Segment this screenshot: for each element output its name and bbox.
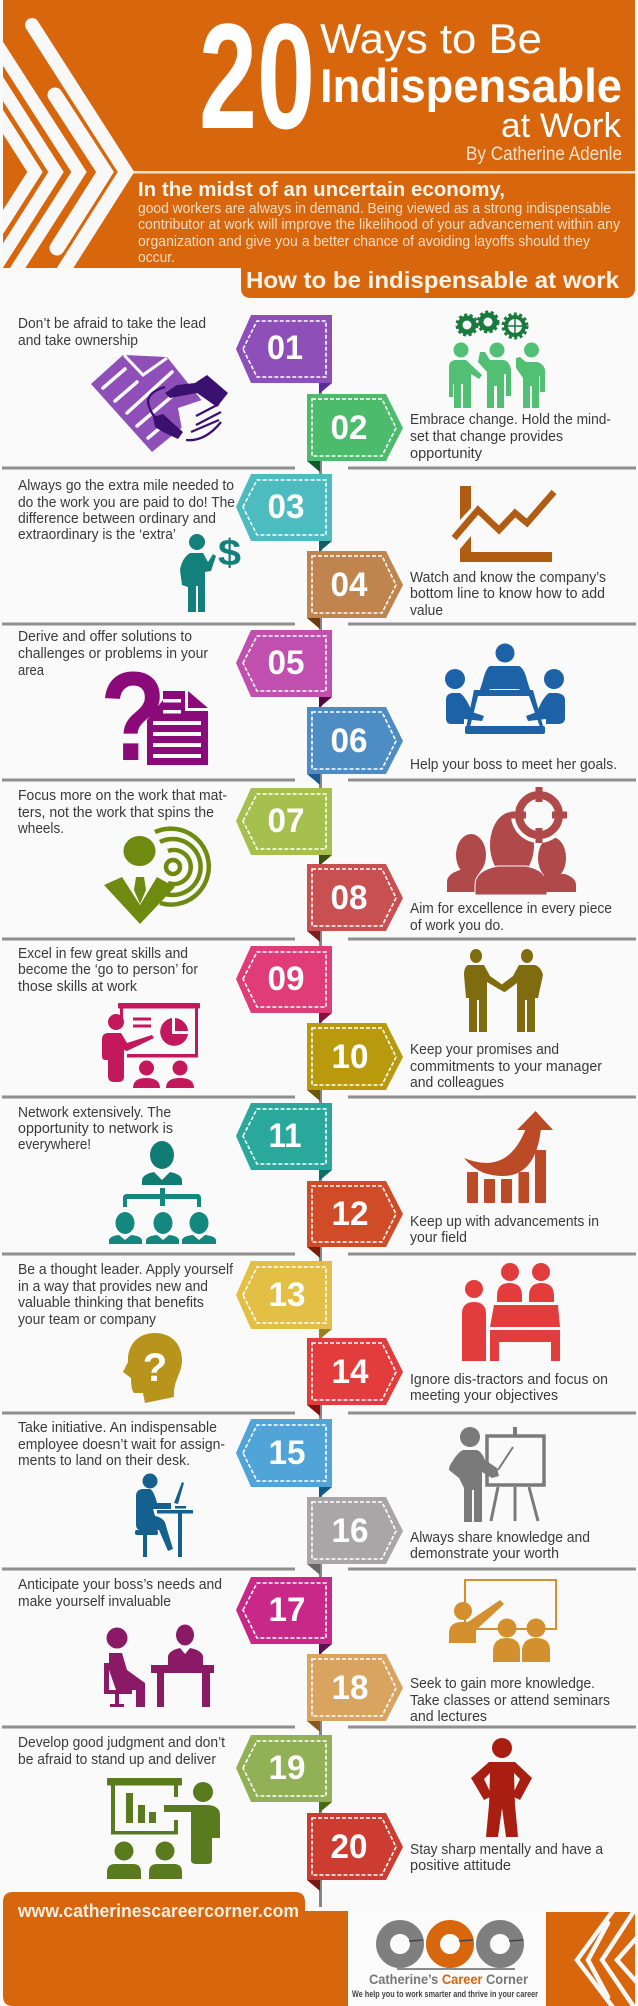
badge 11: [236, 1103, 332, 1181]
icon: two people shaking hands: [464, 949, 543, 1032]
text 15: ments to land on their desk.: [18, 1453, 190, 1469]
tip 01: [18, 315, 332, 452]
text 20: Stay sharp mentally and have a: [410, 1842, 604, 1858]
badge 12: [307, 1181, 403, 1258]
badge 08: 08: [330, 879, 368, 917]
tip 07: [17, 788, 332, 924]
tip 12: [307, 1111, 599, 1258]
tip 10: [307, 949, 602, 1101]
tip 17: [18, 1577, 332, 1707]
text 14: Ignore dis-tractors and focus on: [410, 1372, 608, 1388]
footer chevron panel: [546, 1908, 638, 2006]
text 10: Keep your promises and: [410, 1042, 559, 1058]
text 02: [410, 412, 611, 462]
intro text: contributor at work will improve the likelihood of your advancement within any: [138, 217, 621, 233]
text 05: Derive and offer solutions to: [18, 629, 192, 645]
text 17: make yourself invaluable: [18, 1594, 171, 1610]
text 04: bottom line to know how to add: [410, 586, 605, 602]
logo: [348, 1912, 546, 2006]
text 11: everywhere!: [18, 1137, 91, 1153]
text 12: your field: [410, 1230, 467, 1246]
text 04: Watch and know the company’s: [410, 570, 606, 586]
badge 14: [307, 1338, 403, 1416]
tip 20: [307, 1738, 604, 1891]
text 13: your team or company: [18, 1312, 157, 1328]
badge 16: [307, 1497, 403, 1575]
badge 06: [307, 707, 403, 785]
text 11: opportunity to network is: [18, 1121, 173, 1137]
icon: team with gears: [449, 312, 545, 408]
badge 08: [307, 864, 403, 942]
icon: group with crosshair: [447, 787, 576, 895]
text 17: [18, 1577, 222, 1610]
text 09: [18, 946, 198, 995]
badge 07: 07: [268, 802, 304, 840]
tip 04: [307, 486, 606, 629]
icon: teacher at easel: [449, 1427, 544, 1522]
badge 18: [307, 1654, 403, 1732]
logo: Catherine’s Career Corner: [369, 1971, 528, 1987]
text 08: [410, 901, 612, 934]
text 01: Don’t be afraid to take the lead: [18, 316, 206, 332]
icon: rising arrow and bars: [464, 1111, 553, 1203]
text 08: of work you do.: [410, 918, 504, 934]
text 04: [410, 570, 606, 619]
badge 19: 19: [268, 1749, 306, 1787]
badge 04: [307, 551, 403, 629]
badge 20: 20: [330, 1828, 368, 1866]
badge 10: 10: [332, 1038, 368, 1076]
panel: header: [0, 0, 635, 280]
text 03: Always go the extra mile needed to: [18, 478, 234, 494]
text 02: opportunity: [410, 446, 483, 462]
intro text: [138, 201, 621, 266]
icon: meeting table: [445, 644, 565, 734]
icon: manager with target: [104, 829, 209, 924]
badge 06: 06: [330, 722, 368, 760]
icon: person with dollar: $: [218, 532, 241, 573]
icon: interview at desk: [104, 1624, 214, 1707]
text 12: [410, 1214, 599, 1246]
text 14: meeting your objectives: [410, 1388, 558, 1404]
title line: Indispensable: Indispensable: [320, 59, 622, 112]
badge 03: [236, 474, 332, 552]
title line: Ways to Be: Ways to Be: [320, 15, 542, 62]
panel: footer: [3, 1892, 638, 2006]
text 08: Aim for excellence in every piece: [410, 901, 612, 917]
tip 19: [18, 1735, 332, 1879]
text 09: those skills at work: [18, 979, 138, 995]
badge 20: [307, 1813, 403, 1891]
tip 02: [307, 312, 611, 472]
text 13: Be a thought leader. Apply yourself: [18, 1262, 234, 1278]
tip 08: [307, 787, 612, 942]
text 15: employee doesn’t wait for assign-: [18, 1437, 225, 1453]
badge 16: 16: [332, 1512, 368, 1550]
intro heading: In the midst of an uncertain economy,: [138, 179, 505, 201]
text 09: become the ‘go to person’ for: [18, 962, 198, 978]
text 10: commitments to your manager: [410, 1059, 602, 1075]
icon: people at table: [462, 1263, 560, 1361]
badge 17: [236, 1577, 332, 1655]
badge 10: [307, 1023, 403, 1101]
badge 01: [236, 315, 332, 394]
tip 16: [307, 1427, 590, 1575]
text 18: [410, 1676, 610, 1725]
text 16: [410, 1530, 590, 1562]
logo: We help you to work smarter and thrive in your career: [352, 1989, 538, 1999]
text 09: Excel in few great skills and: [18, 946, 188, 962]
title line: at Work: at Work: [501, 107, 622, 145]
text 15: Take initiative. An indispensable: [18, 1420, 217, 1436]
badge 11: 11: [268, 1117, 302, 1155]
text 05: area: [18, 663, 45, 679]
text 19: Develop good judgment and don’t: [18, 1735, 225, 1751]
tip 14: [307, 1263, 608, 1416]
text 13: [18, 1262, 234, 1328]
badge 12: 12: [332, 1195, 368, 1233]
icon: head with question mark: ?: [143, 1346, 167, 1390]
text 13: in a way that provides new and: [18, 1279, 208, 1295]
icon: classroom teacher: [449, 1580, 556, 1662]
tip 05: [18, 629, 332, 787]
text 01: and take ownership: [18, 333, 138, 349]
text 07: wheels.: [17, 821, 64, 837]
badge 18: 18: [332, 1669, 368, 1707]
badge 01: 01: [267, 329, 303, 367]
badge 09: [236, 946, 332, 1024]
icon: presentation with pie chart: [102, 1003, 200, 1088]
text 07: Focus more on the work that mat-: [18, 788, 227, 804]
intro text: organization and give you a better chance of avoiding layoffs should they: [138, 234, 591, 250]
badge 02: 02: [330, 409, 368, 447]
text 04: value: [410, 603, 443, 619]
tip 06: [307, 644, 617, 785]
badge 19: [236, 1735, 332, 1813]
text 02: Embrace change. Hold the mind-: [410, 412, 611, 428]
icon: chevron pattern: [0, 18, 126, 280]
badge 14: 14: [332, 1353, 369, 1391]
badge 15: 15: [268, 1434, 306, 1472]
text 20: positive attitude: [410, 1858, 511, 1874]
text 19: [18, 1735, 225, 1768]
text 05: challenges or problems in your: [18, 646, 208, 662]
website url: www.catherinescareercorner.com: [17, 1901, 299, 1921]
icon: org chart: [109, 1141, 216, 1244]
icon: question and document: ?: [100, 646, 166, 787]
icon: presenter with bar chart: [107, 1778, 220, 1879]
icon: confident man: [471, 1738, 532, 1837]
text 03: do the work you are paid to do! The: [18, 495, 235, 511]
text 06: Help your boss to meet her goals.: [410, 757, 617, 773]
text 12: Keep up with advancements in: [410, 1214, 599, 1230]
tip 11: [18, 1103, 332, 1244]
text 10: and colleagues: [410, 1075, 504, 1091]
text 03: difference between ordinary and: [18, 511, 216, 527]
badge 09: 09: [268, 960, 304, 998]
badge 05: 05: [268, 644, 304, 682]
section heading tab: How to be indispensable at work: [246, 267, 619, 293]
badge 04: 04: [330, 566, 368, 604]
icon: person at computer desk: [135, 1474, 193, 1557]
icon: person with dollar: [180, 532, 241, 612]
text 17: Anticipate your boss’s needs and: [18, 1577, 222, 1593]
tip 18: [307, 1580, 610, 1732]
tip 09: [18, 946, 332, 1088]
text 15: [18, 1420, 225, 1469]
text 18: Take classes or attend seminars: [410, 1693, 610, 1709]
text 03: extraordinary is the ‘extra’: [18, 527, 176, 543]
text 11: Network extensively. The: [18, 1105, 171, 1121]
text 16: Always share knowledge and: [410, 1530, 590, 1546]
text 14: [410, 1372, 608, 1404]
tip 13: [18, 1261, 332, 1403]
text 20: [410, 1842, 604, 1874]
text 10: [410, 1042, 602, 1091]
badge 02: [307, 394, 403, 472]
icon: head with question mark: [123, 1333, 182, 1403]
badge 13: [236, 1261, 332, 1340]
text 07: [17, 788, 227, 837]
badge 03: 03: [268, 488, 304, 526]
badge 17: 17: [268, 1591, 306, 1629]
text 07: ters, not the work that spins the: [18, 805, 214, 821]
badge 13: 13: [268, 1276, 306, 1314]
intro text: good workers are always in demand. Being viewed as a strong indispensable: [138, 201, 611, 217]
text 13: valuable thinking that benefits: [18, 1295, 204, 1311]
text 18: Seek to gain more knowledge.: [410, 1676, 595, 1692]
text 11: [18, 1105, 173, 1153]
text 18: and lectures: [410, 1709, 487, 1725]
icon: line chart: [454, 486, 554, 562]
text 16: demonstrate your worth: [410, 1546, 559, 1562]
badge 05: [236, 630, 332, 708]
text 02: set that change provides: [410, 429, 563, 445]
text 05: [18, 629, 208, 679]
intro text: occur.: [138, 250, 175, 266]
icon: contract handshake: [91, 355, 228, 452]
timeline spine: [319, 315, 322, 1907]
section heading tab: [241, 262, 635, 298]
text 19: be afraid to stand up and deliver: [18, 1752, 216, 1768]
text 01: [18, 316, 206, 349]
author: By Catherine Adenle: [466, 144, 622, 165]
badge 07: [236, 788, 332, 866]
badge 15: [236, 1419, 332, 1498]
text 03: [18, 478, 235, 543]
tip 03: [18, 474, 332, 612]
tip 15: [18, 1419, 332, 1557]
